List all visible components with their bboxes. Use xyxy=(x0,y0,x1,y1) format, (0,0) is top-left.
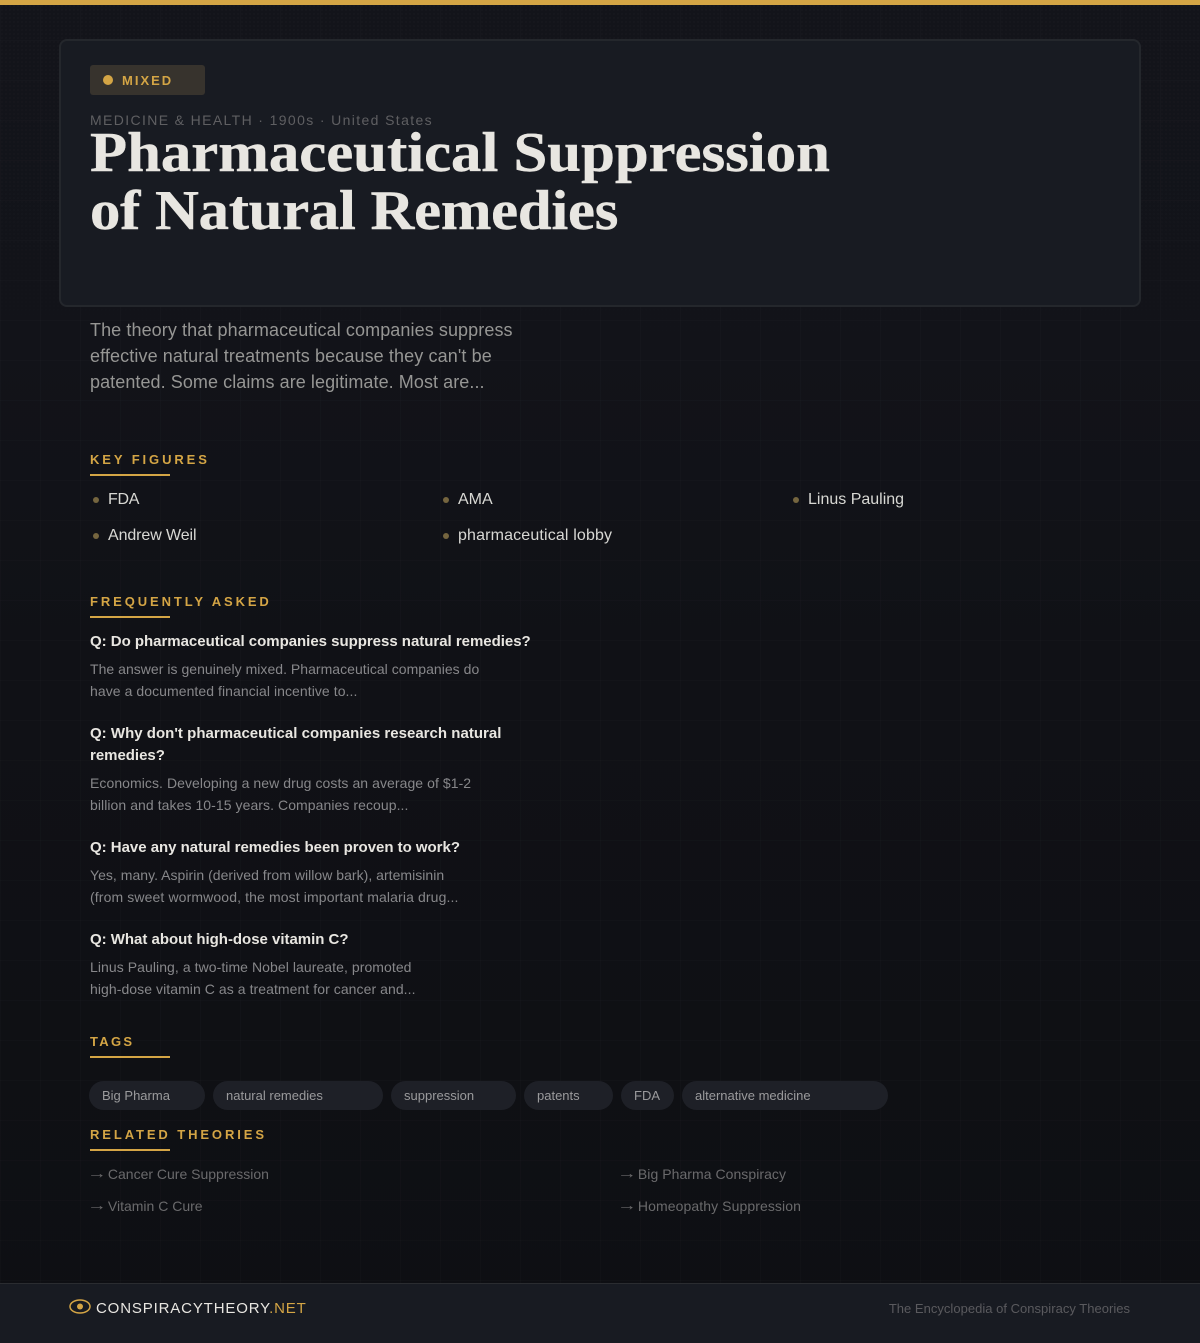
tag: natural remedies xyxy=(213,1081,383,1110)
title: of Natural Remedies xyxy=(90,180,618,242)
related: Cancer Cure Suppression: → xyxy=(87,1165,107,1181)
answer 4 xyxy=(90,959,416,997)
tag: Big Pharma: Big Pharma xyxy=(102,1088,170,1103)
footer tagline: The Encyclopedia of Conspiracy Theories xyxy=(889,1301,1130,1316)
heading: related theories: RELATED THEORIES xyxy=(90,1127,267,1142)
related: Homeopathy Suppression: → xyxy=(617,1197,637,1213)
answer 3: Yes, many. Aspirin (derived from willow bark), artemisinin xyxy=(90,867,444,883)
related: Homeopathy Suppression: Homeopathy Suppression xyxy=(638,1198,801,1214)
tag: patents: patents xyxy=(537,1088,580,1103)
figure: AMA xyxy=(443,491,493,508)
figure: Linus Pauling: Linus Pauling xyxy=(808,491,904,508)
related: Vitamin C Cure: Vitamin C Cure xyxy=(108,1198,203,1214)
answer 3 xyxy=(90,867,459,905)
answer 1 xyxy=(90,661,479,699)
tag: Big Pharma xyxy=(89,1081,205,1110)
tag: alternative medicine: alternative medicine xyxy=(695,1088,811,1103)
panel: header card xyxy=(59,39,1141,307)
badge label: MIXED xyxy=(122,73,173,88)
question 2 xyxy=(90,725,501,764)
heading: tags: TAGS xyxy=(90,1034,134,1049)
figure: FDA: FDA xyxy=(108,491,139,508)
tag: alternative medicine xyxy=(682,1081,888,1110)
related: Big Pharma Conspiracy: Big Pharma Conspiracy xyxy=(638,1166,786,1182)
answer 1: have a documented financial incentive to... xyxy=(90,683,357,699)
figure: FDA xyxy=(93,491,140,508)
intro text xyxy=(90,320,513,392)
answer 2: billion and takes 10-15 years. Companies recoup... xyxy=(90,797,408,813)
tag: suppression xyxy=(391,1081,516,1110)
figure: pharmaceutical lobby: pharmaceutical lobby xyxy=(458,527,612,544)
question 2: Q: Why don't pharmaceutical companies research natural xyxy=(90,725,501,742)
badge dot xyxy=(103,75,113,85)
tag: patents xyxy=(524,1081,613,1110)
question 3: Q: Have any natural remedies been proven to work? xyxy=(90,839,460,856)
related: Vitamin C Cure: → xyxy=(87,1197,107,1213)
related: Cancer Cure Suppression: Cancer Cure Suppression xyxy=(108,1166,269,1182)
answer 2: Economics. Developing a new drug costs an average of $1-2 xyxy=(90,775,471,791)
tag: FDA xyxy=(621,1081,674,1110)
figure: Andrew Weil: Andrew Weil xyxy=(108,527,196,544)
answer 1: The answer is genuinely mixed. Pharmaceutical companies do xyxy=(90,661,479,677)
answer 2 xyxy=(90,775,471,813)
tag: natural remedies: natural remedies xyxy=(226,1088,323,1103)
title xyxy=(90,122,830,242)
status badge: mixed xyxy=(90,65,205,95)
figure: AMA: AMA xyxy=(458,491,493,508)
question 1: Q: Do pharmaceutical companies suppress natural remedies? xyxy=(90,633,531,650)
question 2: remedies? xyxy=(90,747,165,764)
answer 4: high-dose vitamin C as a treatment for cancer and... xyxy=(90,981,416,997)
brand name: CONSPIRACYTHEORY.NET xyxy=(96,1300,307,1316)
icon: eye logo xyxy=(69,1299,91,1314)
intro text: effective natural treatments because they can't be xyxy=(90,346,492,366)
top accent bar xyxy=(0,0,1200,5)
question 4: Q: What about high-dose vitamin C? xyxy=(90,931,348,948)
heading: frequently asked: FREQUENTLY ASKED xyxy=(90,594,272,609)
key figures list xyxy=(93,491,904,544)
related: Big Pharma Conspiracy: → xyxy=(617,1165,637,1181)
heading: key figures: KEY FIGURES xyxy=(90,452,210,467)
answer 3: (from sweet wormwood, the most important malaria drug... xyxy=(90,889,459,905)
answer 4: Linus Pauling, a two-time Nobel laureate, promoted xyxy=(90,959,412,975)
metadata line: MEDICINE & HEALTH · 1900s · United States xyxy=(90,112,433,128)
tag: suppression: suppression xyxy=(404,1088,474,1103)
intro text: patented. Some claims are legitimate. Most are... xyxy=(90,372,485,392)
tag: FDA: FDA xyxy=(634,1088,660,1103)
title: Pharmaceutical Suppression xyxy=(90,122,830,184)
footer xyxy=(0,1283,1200,1343)
intro text: The theory that pharmaceutical companies suppress xyxy=(90,320,513,340)
